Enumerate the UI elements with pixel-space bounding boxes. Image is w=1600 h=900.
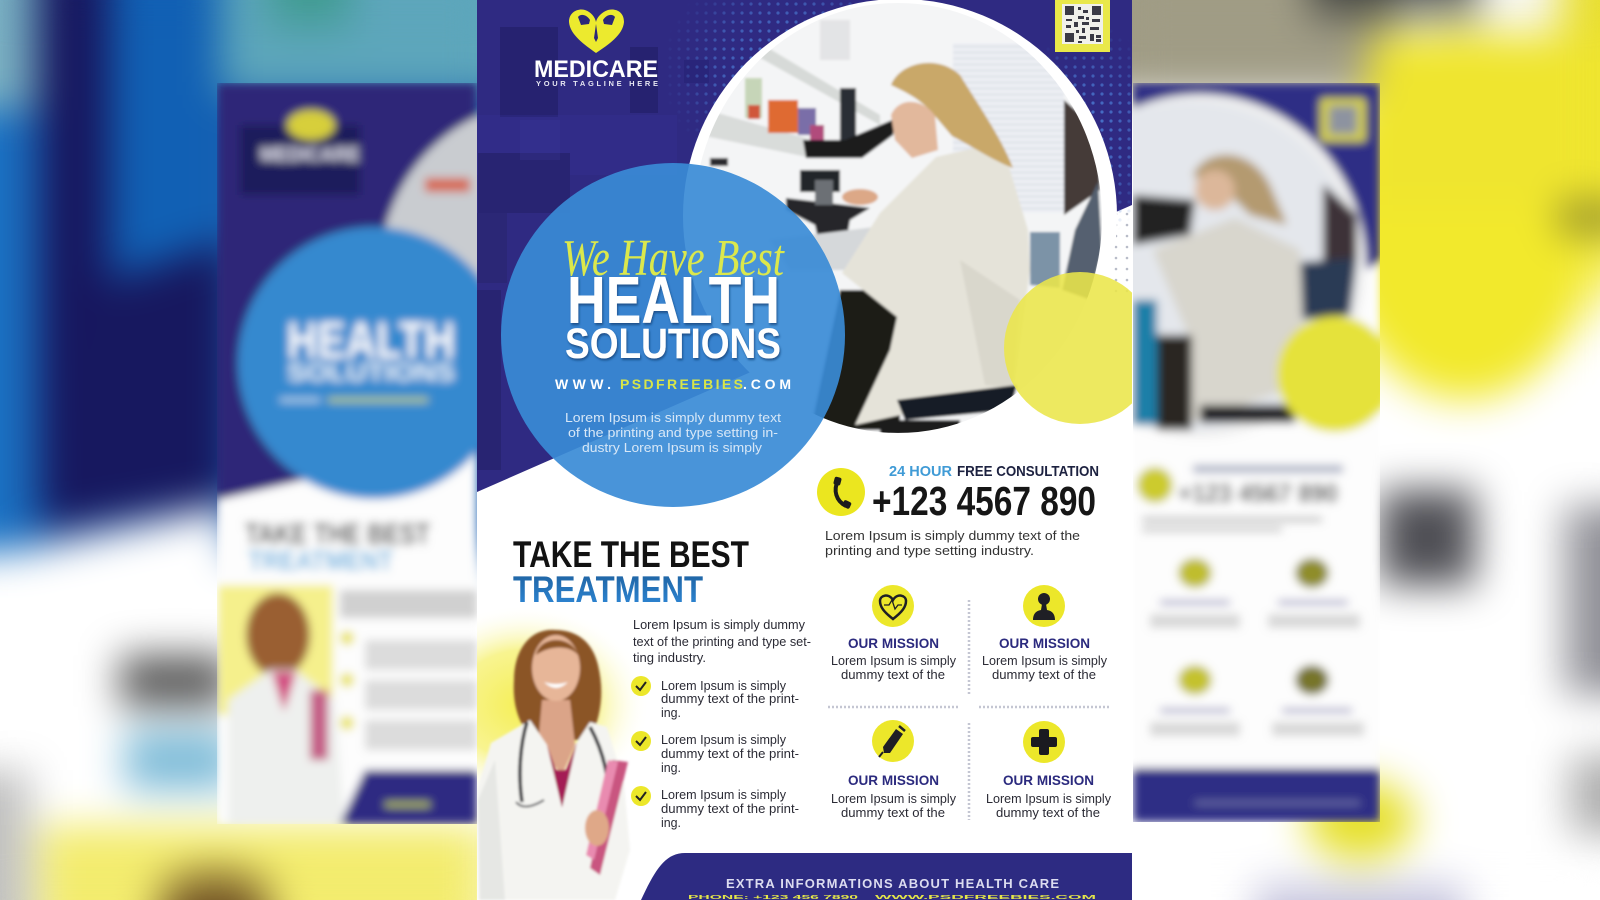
photo white ring <box>683 0 1117 372</box>
blurred side poster, left <box>217 83 477 824</box>
headline SOLUTIONS: SOLUTIONS <box>565 320 781 368</box>
item 2: Lorem Ipsum is simply <box>661 733 787 747</box>
neck <box>538 700 575 775</box>
hair <box>514 630 601 740</box>
photo circle <box>378 107 477 288</box>
mission card 2 <box>982 585 1108 682</box>
right grey dots <box>1114 212 1128 282</box>
item 3: ing. <box>661 816 681 830</box>
mission card 4: dummy text of the <box>996 806 1100 820</box>
heading: take the best treatment <box>513 534 749 610</box>
item 3: dummy text of the print- <box>661 802 799 816</box>
check list <box>631 676 799 830</box>
yellow accent circle <box>1004 272 1132 424</box>
item 3 <box>631 786 799 830</box>
halftone dots <box>670 2 1130 222</box>
intro paragraph <box>633 617 811 665</box>
phone number: +123 4567 890 <box>872 478 1096 524</box>
icon: person <box>1023 585 1065 627</box>
logo icon <box>569 10 624 53</box>
item 1: dummy text of the print- <box>661 692 799 706</box>
text bars <box>340 590 477 618</box>
blurred side poster, left: HEALTH <box>287 312 455 370</box>
blurred side poster, right <box>1133 83 1380 822</box>
woman coat <box>842 148 1030 425</box>
face <box>532 635 580 701</box>
intro paragraph: Lorem Ipsum is simply dummy <box>633 617 805 632</box>
mission card 3: Lorem Ipsum is simply <box>831 792 957 806</box>
website: .COM <box>743 376 791 392</box>
folder <box>590 760 628 875</box>
headline HEALTH: HEALTH <box>567 263 780 338</box>
mission card 4 <box>986 721 1112 820</box>
coat <box>477 720 630 900</box>
window blinds <box>953 43 1064 213</box>
item 2: ing. <box>661 761 681 775</box>
shelves <box>700 20 880 158</box>
flyer white base <box>477 466 538 900</box>
doctor <box>218 585 333 715</box>
item 2 <box>631 731 799 775</box>
consultation text <box>825 528 1080 558</box>
wall <box>1064 100 1100 215</box>
consultation heading <box>889 463 1099 480</box>
blurred side poster, left: MEDICARE <box>260 144 360 166</box>
tagline: YOUR TAGLINE HERE <box>536 79 658 88</box>
hero body text <box>565 411 782 455</box>
brand name: MEDICARE <box>534 56 658 83</box>
QR code <box>1055 0 1110 52</box>
icon: phone <box>817 468 865 516</box>
hero body text: Lorem Ipsum is simply dummy text <box>565 411 782 425</box>
intro paragraph: text of the printing and type set- <box>633 634 811 649</box>
item 1 <box>631 676 799 720</box>
mission card 3 <box>831 720 957 820</box>
mission card 2: OUR MISSION <box>999 635 1090 651</box>
consultation block <box>817 463 1099 558</box>
item 1: ing. <box>661 706 681 720</box>
stethoscope <box>520 722 608 802</box>
consultation text: Lorem Ipsum is simply dummy text of the <box>825 528 1080 543</box>
blue headline circle <box>501 163 845 507</box>
hair <box>891 63 1013 168</box>
mission card 3: dummy text of the <box>841 806 945 820</box>
footer bar: EXTRA INFORMATIONS ABOUT HEALTH CARE <box>726 876 1059 891</box>
icon: syringe <box>872 720 914 762</box>
blue circle <box>238 227 510 499</box>
bar <box>340 770 477 824</box>
blurred side poster, left: TREATMENT <box>248 545 393 576</box>
desk <box>810 290 900 430</box>
main flyer <box>477 0 1132 900</box>
website <box>555 380 790 389</box>
blurred background, right side <box>1125 0 1600 900</box>
hand <box>585 810 609 846</box>
mission card 4: OUR MISSION <box>1003 772 1094 788</box>
logo <box>534 10 658 88</box>
hero body text: dustry Lorem Ipsum is simply <box>582 441 763 455</box>
microscope <box>710 118 897 248</box>
mission card 1 <box>831 585 957 682</box>
navy header shape <box>477 0 1132 492</box>
blurred background, left side <box>0 0 490 900</box>
mission card 1: dummy text of the <box>841 668 945 682</box>
heading: take the best treatment: TAKE THE BEST <box>513 534 749 575</box>
face <box>891 102 938 158</box>
heading: take the best treatment: TREATMENT <box>513 569 703 610</box>
city skyline <box>477 27 709 470</box>
icon: plus <box>1023 721 1065 763</box>
consultation text: printing and type setting industry. <box>825 543 1034 558</box>
website: WWW. <box>555 376 611 392</box>
mission card 4: Lorem Ipsum is simply <box>986 792 1112 806</box>
consultation heading: FREE CONSULTATION <box>957 463 1099 480</box>
logo <box>287 110 335 140</box>
mission card 1: OUR MISSION <box>848 635 939 651</box>
website: PSDFREEBIES <box>620 376 743 392</box>
doctor figure <box>477 630 630 900</box>
consultation heading: 24 HOUR <box>889 463 952 480</box>
blurred side poster, left: TAKE THE BEST <box>245 518 430 551</box>
hand <box>842 189 878 205</box>
footer bar <box>641 853 1132 900</box>
mission card 2: Lorem Ipsum is simply <box>982 654 1108 668</box>
item 2: dummy text of the print- <box>661 747 799 761</box>
blurred side poster, right: +123 4567 890 <box>1178 478 1338 508</box>
mission card 3: OUR MISSION <box>848 772 939 788</box>
item 3: Lorem Ipsum is simply <box>661 788 787 802</box>
script tagline: We Have Best <box>562 230 785 287</box>
lab photo <box>700 3 1102 433</box>
intro paragraph: ting industry. <box>633 650 706 665</box>
item 1: Lorem Ipsum is simply <box>661 679 787 693</box>
doctor glow <box>400 605 650 805</box>
chair base <box>897 385 1017 420</box>
mission card 1: Lorem Ipsum is simply <box>831 654 957 668</box>
blurred side poster, left: SOLUTIONS <box>287 357 455 387</box>
hero body text: of the printing and type setting in- <box>568 426 778 440</box>
icon: heart <box>872 585 914 627</box>
mission card 2: dummy text of the <box>992 668 1096 682</box>
chair <box>1030 232 1060 288</box>
